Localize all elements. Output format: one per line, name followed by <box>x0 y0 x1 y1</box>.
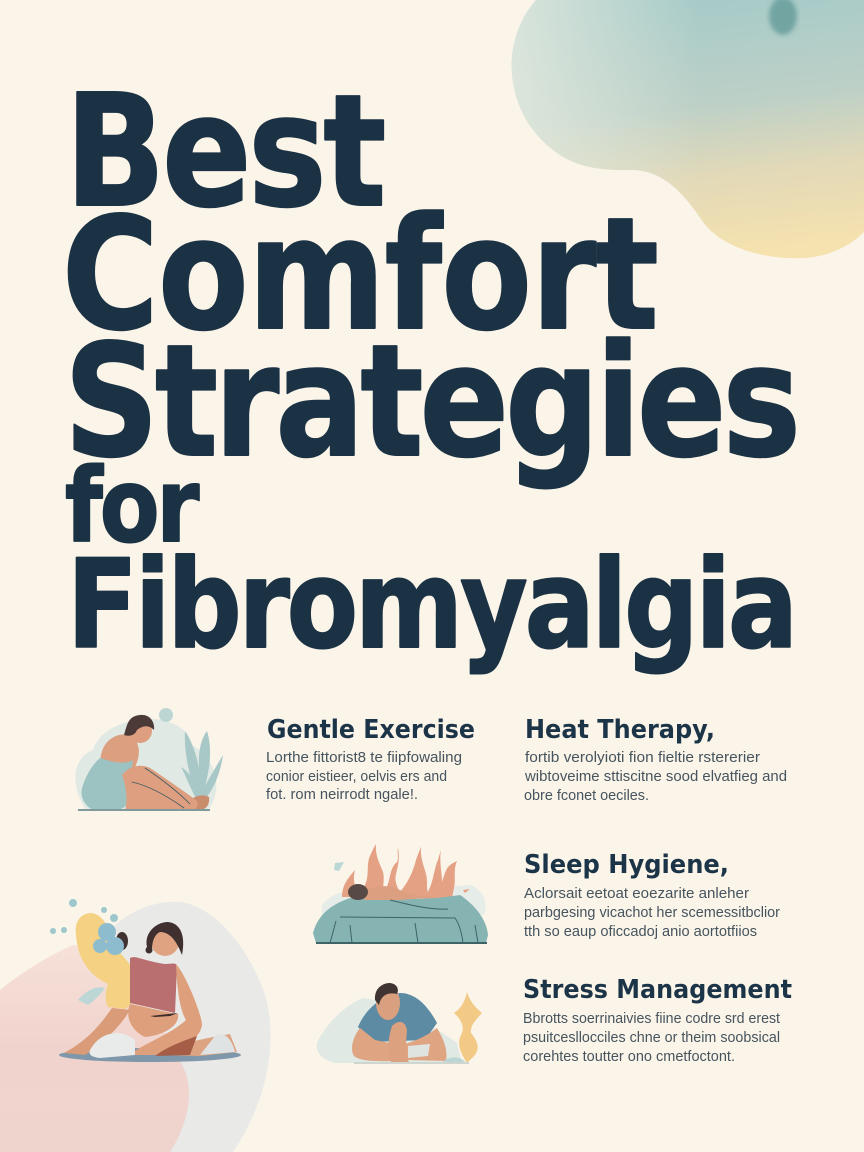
title: Strategies <box>64 311 801 492</box>
text block: heat therapy: wibtoveime sttiscitne sood elvatfieg and <box>524 768 787 785</box>
text block: stress management <box>523 1010 781 1065</box>
text block: sleep hygiene <box>524 885 780 940</box>
illustration: stress management man <box>317 983 482 1064</box>
title: for <box>65 447 200 566</box>
illustration: gentle exercise <box>75 708 223 811</box>
heading: sleep hygiene: Sleep Hygiene, <box>524 850 729 880</box>
title: Comfort <box>62 184 659 365</box>
text block: sleep hygiene: Aclorsait eetoat eoezarite anleher <box>524 885 749 902</box>
text block: gentle exercise: Lorthe fittorist8 te fiipfowaling <box>266 749 462 766</box>
text block: stress management: Bbrotts soerrinaivies fiine codre srd erest <box>523 1010 781 1027</box>
text block: heat therapy <box>524 749 787 804</box>
text block: stress management: psuitcesllocciles chne or theim soobsical <box>523 1029 780 1046</box>
text block: gentle exercise <box>266 749 462 803</box>
text block: sleep hygiene: tth so eaup oficcadoj anio aortotfiios <box>524 923 757 940</box>
watercolor blob: top right <box>512 0 864 258</box>
heading: heat therapy: Heat Therapy, <box>525 715 715 745</box>
text block: gentle exercise: conior eistieer, oelvis ers and <box>266 768 447 785</box>
illustration: woman sitting with flowers <box>50 899 241 1062</box>
title <box>62 61 801 676</box>
illustration: heat therapy bed with flames <box>313 844 488 944</box>
heading: gentle exercise: Gentle Exercise <box>267 715 475 745</box>
text block: stress management: corehtes toutter ono cmetfoctont. <box>523 1048 735 1065</box>
text block: heat therapy: fortib verolyioti fion fieltie rstererier <box>525 749 760 766</box>
heading: stress management: Stress Management <box>523 975 792 1005</box>
text block: heat therapy: obre fconet oeciles. <box>524 787 649 804</box>
watercolor blob: bottom left <box>0 902 270 1152</box>
text block: gentle exercise: fot. rom neirrodt ngale!. <box>266 786 418 803</box>
text block: sleep hygiene: parbgesing vicachot her scemessitbclior <box>524 904 780 921</box>
title: Fibromyalgia <box>67 534 798 676</box>
title: Best <box>65 61 386 242</box>
